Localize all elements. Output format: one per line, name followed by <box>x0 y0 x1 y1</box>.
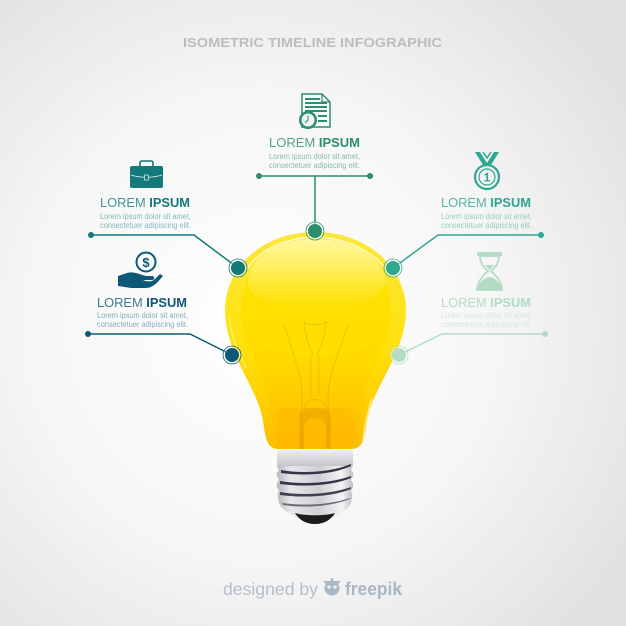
icon: hand with coin <box>118 252 163 288</box>
text block: right lower <box>441 295 532 329</box>
glass bulb <box>225 232 406 449</box>
text block: left lower <box>97 295 188 329</box>
icon: briefcase <box>130 161 163 188</box>
lower glass block <box>278 408 353 449</box>
text block: top: LOREM IPSUM <box>269 135 360 150</box>
bulb base <box>277 450 353 524</box>
inner lens <box>241 240 391 447</box>
text block: left upper: consectetuer adipiscing elit. <box>100 221 191 230</box>
node: left upper <box>88 232 247 277</box>
icon: hand with coin: $ <box>142 255 150 270</box>
text block: left lower: Lorem ipsum dolor sit amet, <box>97 311 188 320</box>
text block: right upper: consectetuer adipiscing elit. <box>441 221 532 230</box>
footer attribution <box>223 578 403 599</box>
text block: right lower: consectetuer adipiscing elit. <box>441 320 532 329</box>
text block: right upper <box>441 195 532 230</box>
node: right upper <box>384 232 544 277</box>
icon: hourglass <box>477 252 502 290</box>
text block: left upper <box>100 195 191 230</box>
text block: right lower: Lorem ipsum dolor sit amet, <box>441 311 532 320</box>
upper glow <box>248 239 385 310</box>
filament <box>284 321 348 449</box>
lower shading <box>245 337 386 447</box>
node: top connector <box>256 173 373 240</box>
light bulb <box>225 232 406 524</box>
footer attribution: freepik <box>345 579 403 599</box>
text block: right upper: LOREM IPSUM <box>441 195 531 210</box>
text block: top: Lorem ipsum dolor sit amet, <box>269 152 360 161</box>
text block: left lower: consectetuer adipiscing elit. <box>97 320 188 329</box>
filament stem <box>299 408 331 449</box>
text block: left upper: LOREM IPSUM <box>100 195 190 210</box>
icon: freepik mascot <box>323 578 341 596</box>
text block: left upper: Lorem ipsum dolor sit amet, <box>100 212 191 221</box>
text block: right lower: LOREM IPSUM <box>441 295 531 310</box>
rim highlights <box>229 237 385 442</box>
icon: medal <box>475 152 499 189</box>
node: left lower <box>85 331 241 364</box>
footer attribution: designed by <box>223 579 318 599</box>
icon: medal: 1 <box>484 170 491 184</box>
text block: left lower: LOREM IPSUM <box>97 295 187 310</box>
icon: document with clock <box>299 94 330 129</box>
title: ISOMETRIC TIMELINE INFOGRAPHIC <box>183 35 443 50</box>
text block: top: consectetuer adipiscing elit. <box>269 161 360 170</box>
node: right lower <box>390 331 548 364</box>
text block: top <box>269 135 360 170</box>
text block: right upper: Lorem ipsum dolor sit amet, <box>441 212 532 221</box>
